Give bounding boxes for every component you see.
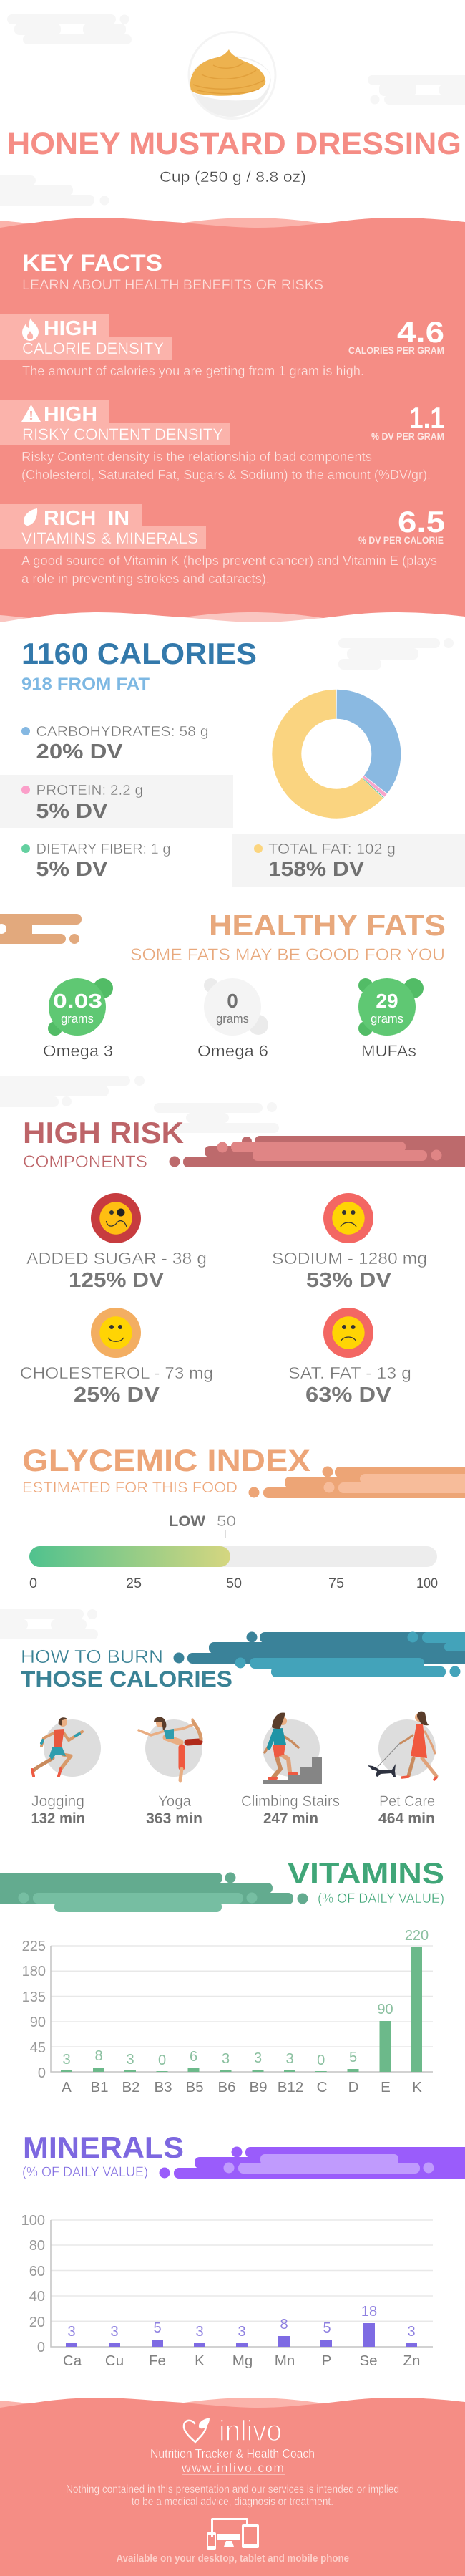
bar chart: minerals: K — [195, 2353, 205, 2369]
website link: www.inlivo.com — [181, 2461, 284, 2475]
gauge scale labels: 100 — [416, 1576, 438, 1591]
bar chart: vitamins: B9 — [249, 2079, 268, 2095]
stat: omega 3: grams — [61, 1013, 94, 1026]
icon: warning triangle — [21, 405, 41, 422]
subheading: components: COMPONENTS — [23, 1152, 147, 1172]
heading: key facts: KEY FACTS — [22, 250, 162, 276]
bar chart: vitamins — [22, 1928, 433, 2095]
fact: risky content density: 1.1 — [409, 401, 444, 435]
bar chart: minerals: P — [322, 2353, 331, 2369]
legend: protein: 5% DV — [36, 800, 108, 823]
activity: climbing stairs: 247 min — [263, 1810, 318, 1827]
heading: high risk: HIGH RISK — [23, 1116, 184, 1149]
bar chart: minerals: Zn — [403, 2353, 420, 2369]
bar chart: vitamins: 0 — [38, 2065, 46, 2081]
fact: risky content density — [0, 400, 444, 482]
icon: sad face — [323, 1193, 373, 1243]
bar chart: vitamins: 3 — [254, 2050, 262, 2066]
fact: rich in vitamins and minerals: 6.5 — [398, 505, 445, 539]
activity: pet care: Pet Care — [379, 1793, 435, 1810]
title: HONEY MUSTARD DRESSING — [7, 127, 461, 161]
activity: climbing stairs: Climbing Stairs — [241, 1793, 340, 1810]
activity: climbing stairs — [241, 1713, 340, 1827]
activity: yoga — [139, 1717, 202, 1827]
icon: desktop, tablet and phone — [207, 2518, 259, 2550]
gauge scale labels: 0 — [29, 1576, 37, 1591]
item: cholesterol — [20, 1308, 213, 1407]
bar chart: minerals: 5 — [323, 2320, 331, 2336]
subheading: glycemic index: ESTIMATED FOR THIS FOOD — [22, 1480, 238, 1496]
bar chart: vitamins: 3 — [62, 2052, 71, 2068]
icon: woman climbing stairs — [263, 1713, 322, 1784]
bar chart: minerals: 3 — [195, 2324, 204, 2340]
item: added sugar: ADDED SUGAR - 38 g — [26, 1249, 207, 1268]
item: cholesterol: CHOLESTEROL - 73 mg — [20, 1364, 213, 1382]
activity: pet care — [368, 1712, 436, 1827]
bar chart: vitamins: 0 — [317, 2052, 325, 2068]
icon: yoga pose — [139, 1717, 202, 1780]
legend: total fat: TOTAL FAT: 102 g — [268, 841, 396, 857]
fact: rich in vitamins and minerals: a role in preventing strokes and cataracts). — [21, 571, 270, 586]
icon: sick face — [91, 1193, 141, 1243]
fact: rich in vitamins and minerals — [0, 504, 445, 586]
fact: calorie density: HIGH — [44, 317, 97, 340]
item: sodium: SODIUM - 1280 mg — [272, 1249, 427, 1268]
panel: key facts — [0, 218, 465, 632]
bar chart: vitamins: B3 — [154, 2079, 172, 2095]
item: saturated fat: 63% DV — [305, 1384, 392, 1407]
icon: happy face — [91, 1308, 141, 1358]
icon: sad face — [323, 1308, 373, 1358]
heading: minerals: MINERALS — [23, 2131, 184, 2164]
subheading: calories from fat: 918 FROM FAT — [21, 675, 150, 694]
bar chart: vitamins: B5 — [185, 2079, 204, 2095]
decorative cloud: high risk — [169, 1136, 465, 1167]
stat: omega 6 — [197, 978, 268, 1060]
subheading: minerals: (% OF DAILY VALUE) — [22, 2165, 148, 2180]
legend: dietary fiber: 5% DV — [36, 858, 108, 881]
activity: pet care: 464 min — [378, 1810, 435, 1827]
fact: risky content density: Risky Content density is the relationship of bad components — [21, 450, 372, 464]
bar chart: minerals: 20 — [29, 2315, 45, 2330]
bar chart: vitamins: 135 — [22, 1989, 46, 2005]
subheading: healthy fats: SOME FATS MAY BE GOOD FOR YOU — [130, 945, 445, 965]
serving size: Cup (250 g / 8.8 oz) — [160, 169, 306, 185]
fact: calorie density: 4.6 — [397, 315, 444, 349]
bar chart: minerals: 3 — [67, 2324, 76, 2340]
legend: dietary fiber: DIETARY FIBER: 1 g — [36, 841, 170, 857]
bar chart: minerals: 3 — [110, 2324, 119, 2340]
bar chart: vitamins: 5 — [349, 2050, 357, 2065]
fact: calorie density: The amount of calories you are getting from 1 gram is high. — [22, 364, 364, 378]
bar chart: minerals: Ca — [63, 2353, 82, 2369]
marker label: low 50: LOW — [169, 1513, 205, 1530]
heading: vitamins: VITAMINS — [288, 1856, 444, 1890]
disclaimer: to be a medical advice, diagnosis or treatment. — [132, 2496, 333, 2508]
bar chart: minerals — [21, 2213, 433, 2369]
activity: jogging — [31, 1717, 101, 1827]
bar chart: minerals: 5 — [153, 2320, 162, 2336]
bar chart: vitamins: 45 — [30, 2040, 46, 2056]
heading: how to burn: HOW TO BURN — [21, 1646, 163, 1667]
bar chart: vitamins: A — [62, 2079, 72, 2095]
disclaimer: Nothing contained in this presentation and our services is intended or implied — [66, 2484, 399, 2496]
bar chart: vitamins: E — [381, 2079, 391, 2095]
stat: omega 3 — [43, 978, 113, 1060]
stat: omega 6: Omega 6 — [197, 1042, 268, 1060]
legend: protein: PROTEIN: 2.2 g — [36, 783, 143, 799]
fact: rich in vitamins and minerals: RICH IN — [44, 507, 129, 530]
fact: rich in vitamins and minerals: A good source of Vitamin K (helps prevent cancer) and Vitamin E (plays — [21, 554, 437, 568]
bar chart: minerals: 0 — [37, 2340, 45, 2355]
marker label: low 50: 50 — [217, 1513, 236, 1530]
fact: calorie density: CALORIE DENSITY — [22, 339, 164, 357]
fact: risky content density: % DV PER GRAM — [371, 430, 444, 442]
legend: protein — [0, 775, 233, 828]
heading: glycemic index: GLYCEMIC INDEX — [22, 1444, 310, 1478]
fact: rich in vitamins and minerals: VITAMINS & MINERALS — [21, 529, 198, 547]
panel: healthy fats — [0, 908, 446, 1060]
bar chart: vitamins: B2 — [122, 2079, 140, 2095]
panel: calories — [0, 637, 465, 887]
item: saturated fat: SAT. FAT - 13 g — [288, 1364, 411, 1382]
activity: yoga: Yoga — [158, 1793, 191, 1810]
panel: high risk components — [20, 1116, 465, 1407]
panel: minerals — [21, 2131, 465, 2369]
logo: inlivo: inlivo — [219, 2414, 282, 2447]
stat: omega 6: 0 — [227, 990, 238, 1012]
tagline: Nutrition Tracker & Health Coach — [150, 2446, 315, 2461]
bar chart: minerals: 40 — [29, 2289, 45, 2305]
fact: risky content density: (Cholesterol, Saturated Fat, Sugars & Sodium) to the amount (%DV/gr). — [21, 468, 431, 482]
item: cholesterol: 25% DV — [74, 1384, 160, 1407]
availability note: Available on your desktop, tablet and mobile phone — [116, 2552, 349, 2565]
decorative clouds: header — [0, 14, 465, 206]
legend: total fat: 158% DV — [268, 858, 365, 881]
stat: omega 3: Omega 3 — [43, 1042, 113, 1060]
decorative cloud: calories — [338, 638, 454, 670]
bar chart: vitamins: 3 — [222, 2051, 230, 2067]
bar chart: minerals: 80 — [29, 2238, 45, 2254]
gauge scale labels — [29, 1576, 438, 1591]
bar chart: vitamins: 90 — [377, 2002, 393, 2017]
bar chart: vitamins: 225 — [22, 1939, 46, 1954]
bar chart: vitamins: 6 — [190, 2049, 197, 2065]
bar chart: vitamins: 3 — [126, 2052, 134, 2068]
panel: vitamins — [0, 1856, 444, 2095]
subheading: key facts: LEARN ABOUT HEALTH BENEFITS OR RISKS — [22, 278, 323, 293]
disclaimer — [66, 2484, 399, 2508]
panel: glycemic index — [22, 1444, 465, 1591]
gauge scale labels: 50 — [226, 1576, 242, 1591]
bar chart: vitamins: 180 — [22, 1964, 46, 1979]
bar chart: minerals: Cu — [105, 2353, 124, 2369]
bar chart: vitamins: B12 — [278, 2079, 303, 2095]
panel: footer — [0, 2398, 465, 2576]
icon: flame — [22, 318, 39, 341]
bar chart: minerals: 3 — [407, 2324, 416, 2340]
bar chart: vitamins: 220 — [405, 1928, 429, 1944]
decorative cloud: healthy fats — [0, 914, 82, 944]
decorative cloud: burn left — [0, 1609, 98, 1639]
bar chart: vitamins: K — [412, 2079, 422, 2095]
decorative clouds: between fats and risk — [0, 1076, 279, 1133]
stat: MUFAs: MUFAs — [361, 1042, 416, 1060]
marker label: low 50 — [169, 1513, 236, 1538]
activity: jogging: Jogging — [31, 1793, 84, 1810]
donut chart: macronutrients — [287, 704, 386, 804]
icon: bowl of honey mustard dressing — [189, 32, 275, 119]
bar chart: minerals: 3 — [238, 2324, 246, 2340]
bar chart: minerals: 100 — [21, 2213, 45, 2229]
bar chart: vitamins: 90 — [30, 2015, 46, 2030]
fact: calorie density: CALORIES PER GRAM — [348, 344, 444, 356]
bar chart: minerals: 18 — [361, 2304, 377, 2320]
icon: jogger — [32, 1717, 101, 1777]
bar chart: minerals: Fe — [149, 2353, 166, 2369]
stat: omega 6: grams — [216, 1013, 249, 1026]
item: added sugar: 125% DV — [69, 1269, 165, 1292]
item: sodium — [272, 1193, 427, 1292]
bar chart: vitamins: C — [317, 2079, 328, 2095]
heading: those calories: THOSE CALORIES — [21, 1666, 232, 1692]
bar chart: vitamins: 0 — [158, 2052, 166, 2068]
fact: risky content density: HIGH — [44, 403, 97, 426]
icon: leaf — [24, 508, 37, 526]
gauge scale labels: 25 — [126, 1576, 142, 1591]
item: saturated fat — [288, 1308, 411, 1407]
fact: risky content density: RISKY CONTENT DENSITY — [22, 425, 223, 443]
icon: woman walking dog — [368, 1712, 436, 1780]
icon: heart with leaf — [184, 2418, 210, 2442]
fact: calorie density — [0, 314, 444, 378]
decorative cloud: burn — [173, 1631, 465, 1677]
decorative cloud: minerals — [159, 2147, 465, 2179]
legend: carbohydrates: CARBOHYDRATES: 58 g — [36, 724, 209, 740]
legend: carbohydrates — [21, 724, 209, 763]
stat: MUFAs: grams — [371, 1013, 403, 1026]
bar chart: minerals: Mg — [232, 2353, 253, 2369]
stat: omega 3: 0.03 — [53, 990, 102, 1012]
fact: rich in vitamins and minerals: % DV PER CALORIE — [358, 534, 444, 546]
gauge scale labels: 75 — [328, 1576, 344, 1591]
item: added sugar — [26, 1193, 207, 1292]
activity: jogging: 132 min — [31, 1810, 85, 1827]
stat: MUFAs: 29 — [376, 990, 398, 1012]
bar chart: minerals: 8 — [280, 2317, 288, 2333]
item: sodium: 53% DV — [306, 1269, 392, 1292]
bar chart: minerals: Se — [359, 2353, 378, 2369]
decorative cloud: glycemic — [249, 1467, 465, 1498]
bar chart: vitamins: B6 — [217, 2079, 236, 2095]
stat: MUFAs — [358, 978, 424, 1060]
legend: dietary fiber — [21, 841, 170, 881]
bar chart: vitamins: B1 — [90, 2079, 109, 2095]
gauge bar: glycemic index — [29, 1546, 437, 1567]
bar chart: vitamins: D — [348, 2079, 358, 2095]
logo: inlivo — [184, 2414, 282, 2447]
heading: healthy fats: HEALTHY FATS — [209, 908, 446, 942]
legend: carbohydrates: 20% DV — [36, 741, 123, 763]
subheading: vitamins: (% OF DAILY VALUE) — [318, 1891, 444, 1906]
bar chart: minerals: Mn — [275, 2353, 295, 2369]
decorative cloud: vitamins — [0, 1872, 308, 1912]
legend: total fat — [232, 834, 465, 887]
bar chart: minerals: 60 — [29, 2264, 45, 2280]
panel: how to burn those calories — [21, 1631, 465, 1827]
bar chart: vitamins: 3 — [285, 2051, 294, 2067]
activity: yoga: 363 min — [146, 1810, 202, 1827]
bar chart: vitamins: 8 — [94, 2048, 103, 2064]
heading: calories: 1160 CALORIES — [21, 637, 257, 670]
